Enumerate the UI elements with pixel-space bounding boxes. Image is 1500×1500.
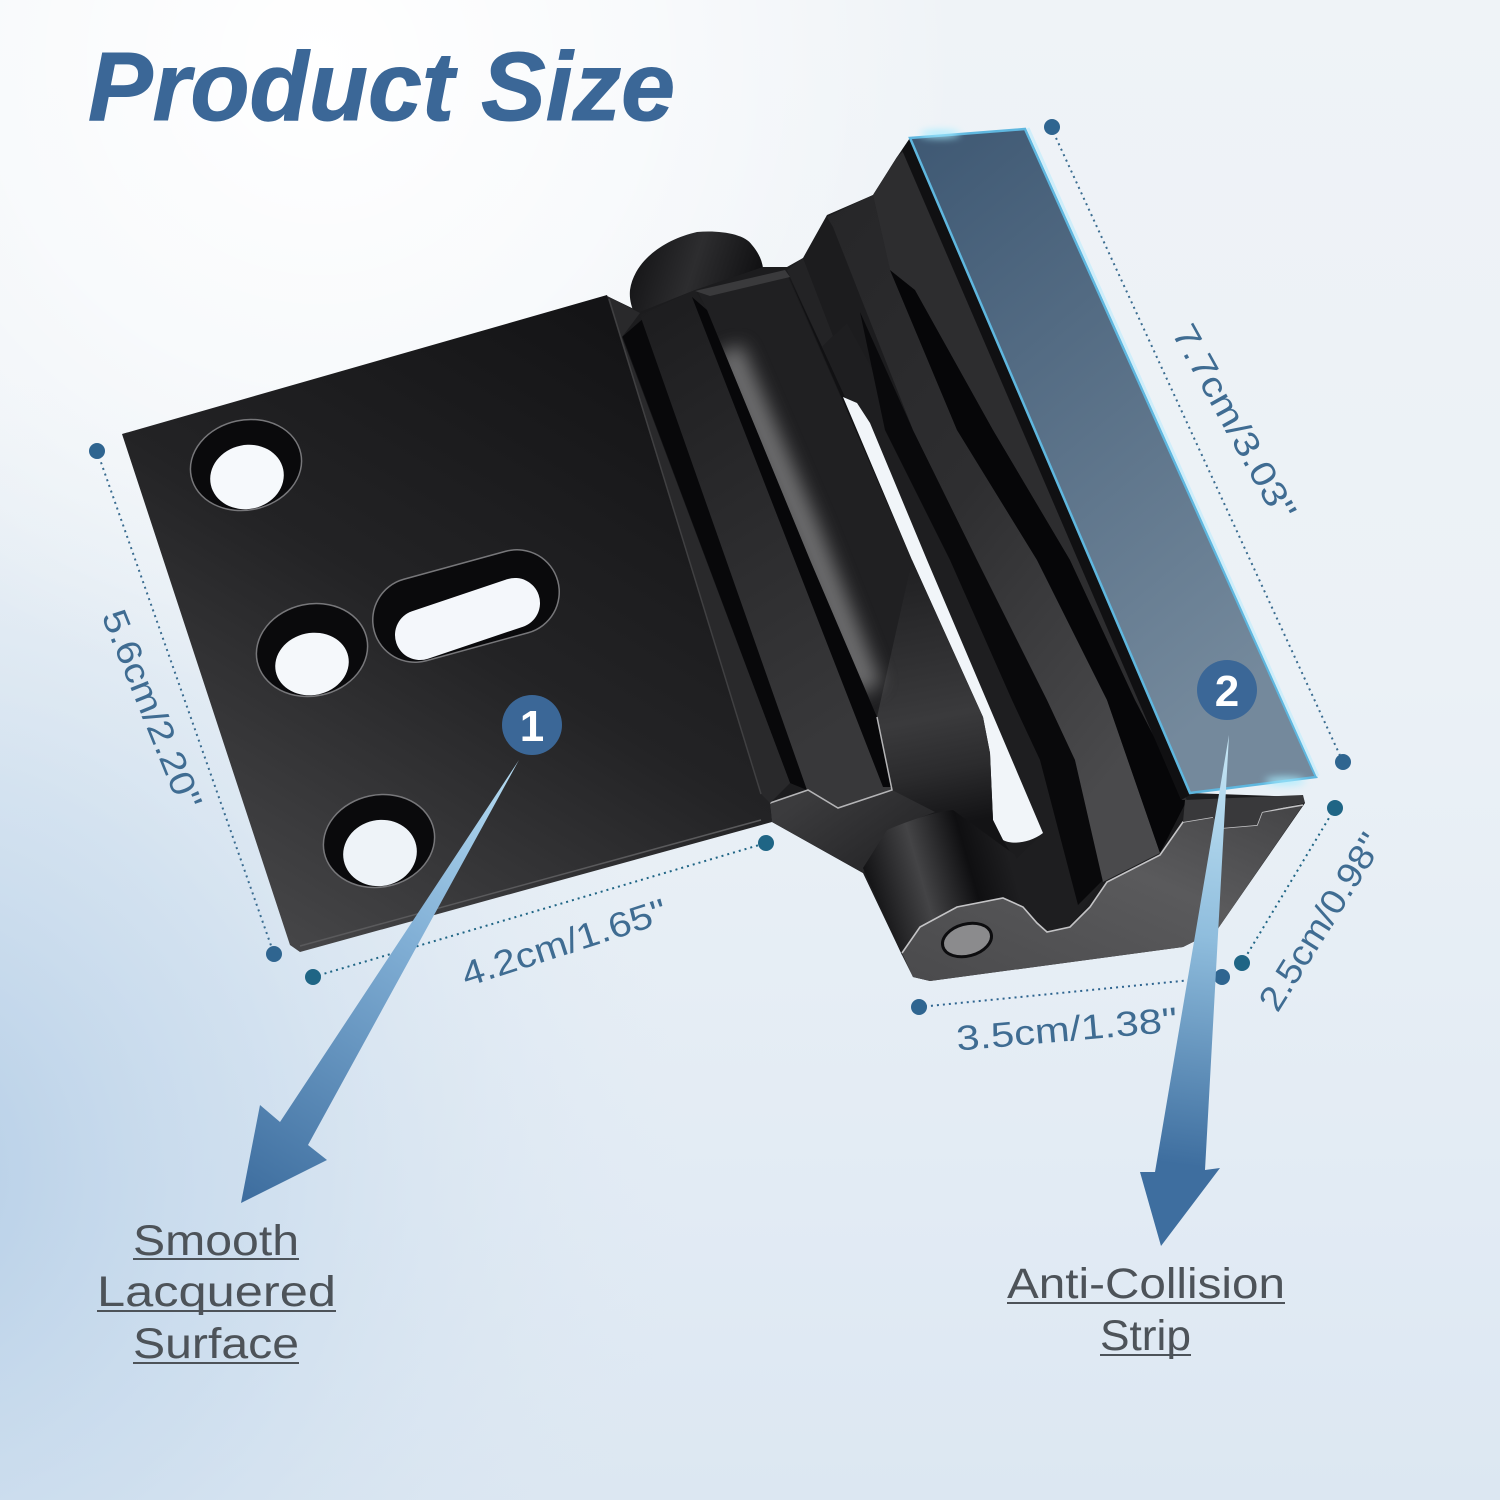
- dimension: 3.5cm: 3.5cm/1.38'': [955, 1000, 1179, 1059]
- anti-collision strip: [910, 129, 1316, 793]
- end face: [902, 805, 1303, 981]
- plate fold line: [609, 299, 761, 794]
- small upper rib with notch: [787, 258, 833, 347]
- label: smooth lacquered surface: [97, 1217, 336, 1368]
- dark sliver along strip: [902, 138, 1190, 800]
- lower bridge: [877, 560, 1015, 860]
- rim highlight: [770, 717, 892, 808]
- label: smooth lacquered surface: Surface: [133, 1320, 299, 1368]
- badge 2: 2: [1215, 667, 1239, 716]
- label: anti-collision strip: Anti-Collision: [1007, 1260, 1285, 1308]
- top pin cylinder: [630, 232, 775, 322]
- arrow 2: [1140, 735, 1229, 1246]
- dimension: 7.7cm: [1044, 119, 1351, 770]
- badge 1: [502, 695, 562, 755]
- lower pin cylinder: [863, 810, 1040, 955]
- thin side ridge: [873, 150, 1187, 800]
- label: smooth lacquered surface: Lacquered: [97, 1268, 336, 1316]
- oblong slot hole: [415, 592, 517, 635]
- slot opening: [843, 397, 1043, 843]
- badge 1: 1: [520, 702, 544, 751]
- hinge body silhouette: [607, 138, 1305, 981]
- strip outline: [910, 129, 1316, 793]
- label: anti-collision strip: [1007, 1260, 1285, 1360]
- dark wedge beside slot: [787, 272, 912, 560]
- dimension: 7.7cm: 7.7cm/3.03'': [1164, 318, 1304, 527]
- product: black door hinge bracket: [122, 128, 1318, 981]
- strip glow highlights: [920, 130, 1305, 784]
- black channel beside plate: [622, 317, 807, 790]
- trough base: [697, 270, 912, 717]
- trough highlight: [728, 350, 868, 690]
- dark band right of slot: [822, 323, 1103, 932]
- label: smooth lacquered surface: Smooth: [133, 1217, 299, 1265]
- dimension: 3.5cm: [911, 969, 1230, 1059]
- badge 2: [1197, 660, 1257, 720]
- black channel next to strip: [890, 270, 1187, 853]
- mounting plate: [122, 295, 790, 952]
- dimension: 5.6cm: 5.6cm/2.20'': [94, 604, 209, 815]
- screw hole 3: [315, 784, 443, 898]
- narrow black stripe: [692, 297, 892, 787]
- arrow 1: [241, 760, 519, 1203]
- strip right halo: [1028, 128, 1318, 776]
- title: Product Size: [88, 32, 675, 141]
- label: anti-collision strip: Strip: [1100, 1312, 1191, 1360]
- end face profile edge: [902, 805, 1303, 953]
- black stripe left of second ridge: [860, 312, 1103, 905]
- plate bottom edge highlight: [300, 820, 761, 946]
- shadow gap beneath strip: [1183, 795, 1305, 828]
- first rib: [640, 290, 892, 808]
- screw hole 2: [248, 593, 376, 707]
- pin end: [939, 918, 995, 962]
- dimension: 2.5cm: 2.5cm/0.98'': [1251, 826, 1391, 1018]
- plate join rim: [770, 790, 935, 873]
- dimension: 4.2cm: [305, 835, 774, 995]
- dimension: 2.5cm: [1234, 800, 1391, 1018]
- second ridge: [827, 195, 1160, 882]
- trough top rim: [695, 270, 790, 296]
- dimension: 4.2cm: 4.2cm/1.65'': [457, 891, 672, 995]
- screw hole 1: [182, 409, 310, 521]
- plate bevel beside fold: [607, 296, 790, 803]
- dimension: 5.6cm: [89, 443, 282, 962]
